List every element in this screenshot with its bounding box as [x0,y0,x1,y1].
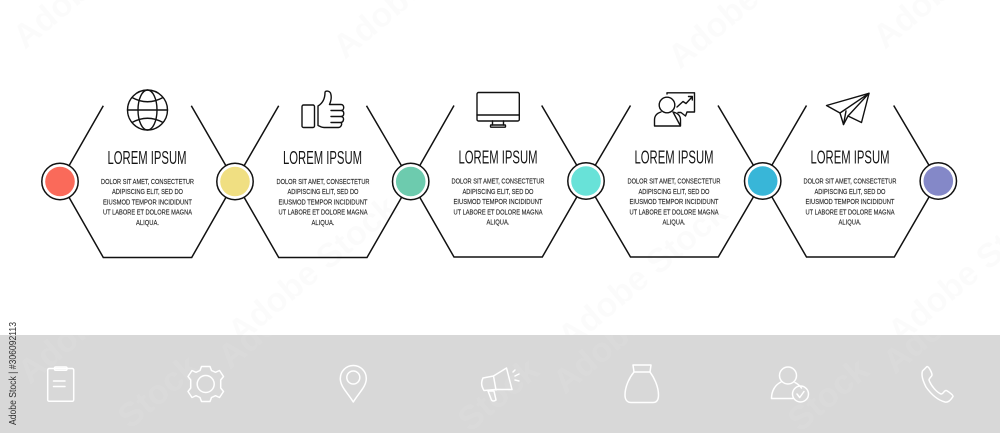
body text 5: EIUSMOD TEMPOR INCIDIDUNT [806,197,895,206]
node: violet circle [920,163,956,199]
heading 5: LOREM IPSUM [810,146,890,168]
body text 4: DOLOR SIT AMET, CONSECTETUR [628,177,720,186]
node: blue circle [744,163,781,199]
heading 1: LOREM IPSUM [108,147,186,168]
body text 1: ALIQUA. [136,218,159,227]
body text 4: ALIQUA. [662,218,686,226]
body text 1: ADIPISCING ELIT, SED DO [112,187,183,196]
heading 2: LOREM IPSUM [283,147,362,168]
node: green circle [392,163,429,200]
body text 2 [276,177,370,227]
node: turquoise circle [568,163,604,199]
hexagon outline 3 [411,106,586,257]
body text 1 [101,177,194,227]
panel: step 3 [411,92,586,257]
icon: location pin [340,366,366,402]
heading 3: LOREM IPSUM [458,146,538,168]
body text 3: ADIPISCING ELIT, SED DO [462,187,534,196]
body text 2: EIUSMOD TEMPOR INCIDIDUNT [278,197,368,206]
icon: paper plane [826,93,869,124]
icon: clipboard [48,367,74,401]
body text 5: DOLOR SIT AMET, CONSECTETUR [804,177,896,186]
body text 2: ALIQUA. [312,218,334,227]
body text 4: EIUSMOD TEMPOR INCIDIDUNT [630,197,719,206]
body text 1: DOLOR SIT AMET, CONSECTETUR [101,177,194,186]
body text 5: UT LABORE ET DOLORE MAGNA [806,207,895,216]
hexagon outline 5 [763,106,938,257]
icon: megaphone [482,368,519,401]
heading 4: LOREM IPSUM [634,146,714,168]
body text 3: EIUSMOD TEMPOR INCIDIDUNT [454,197,543,206]
hexagon outline 1 [60,106,235,258]
stock watermarks on grey band: Adobe [546,304,651,401]
icon: thumbs up [302,91,344,128]
body text 4 [628,177,720,226]
icon: globe [128,90,168,130]
panel: step 4 [586,93,763,257]
body text 1: UT LABORE ET DOLORE MAGNA [103,208,192,217]
node: yellow circle [217,163,253,200]
icon: monitor [477,92,519,127]
body text 2: UT LABORE ET DOLORE MAGNA [278,208,368,217]
icon: telephone [922,366,953,402]
icon: user with check [772,367,808,402]
panel: step 5 [763,93,938,257]
body text 3: ALIQUA. [486,218,510,226]
body text 5: ADIPISCING ELIT, SED DO [814,187,886,196]
hexagon outline 2 [235,106,411,258]
body text 3 [452,177,544,226]
side credit text: Adobe Stock | #306092113 [7,322,19,425]
stock watermarks on grey band [11,279,981,433]
body text 4: UT LABORE ET DOLORE MAGNA [630,207,719,216]
body text 4: ADIPISCING ELIT, SED DO [638,187,710,196]
body text 5: ALIQUA. [838,218,862,226]
hexagon outline 4 [586,106,763,257]
stock watermarks on grey band: Adobe [211,279,316,376]
node: red circle [42,163,78,200]
icon: gear [188,366,224,402]
body text 3: DOLOR SIT AMET, CONSECTETUR [452,177,544,186]
body text 3: UT LABORE ET DOLORE MAGNA [454,207,543,216]
body text 2: DOLOR SIT AMET, CONSECTETUR [276,177,370,186]
icon: money bag [625,365,658,402]
panel: step 1 [60,90,235,258]
bottom grey band [0,335,1000,433]
body text 5 [804,177,896,226]
stock watermarks on grey band: Adobe [876,284,981,381]
panel: step 2 [235,91,411,258]
body text 1: EIUSMOD TEMPOR INCIDIDUNT [103,197,192,206]
body text 2: ADIPISCING ELIT, SED DO [288,187,359,196]
stock watermarks on grey band: Adobe [11,294,116,391]
icon: person with chart speech bubble [654,93,694,126]
